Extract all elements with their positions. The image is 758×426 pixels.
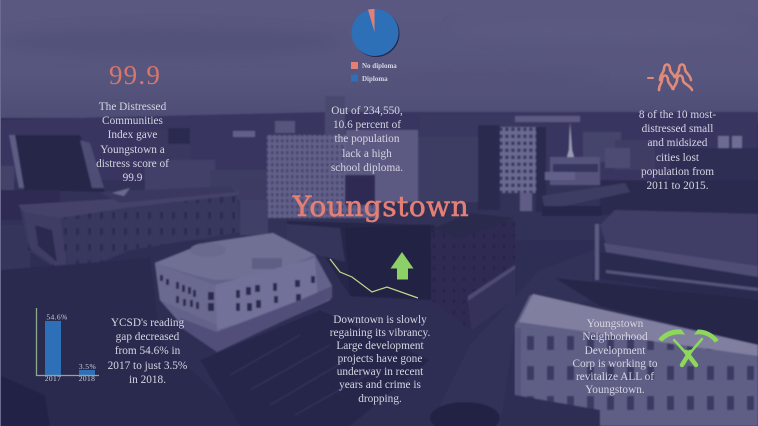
pie chart: diploma share [351, 9, 400, 83]
text: population loss: 2011 to 2015. [646, 180, 709, 192]
text: reading gap: YCSD's reading [111, 317, 184, 329]
text: reading gap [108, 317, 187, 386]
bar chart: reading gap [36, 308, 99, 383]
text: neighborhood corp: Development [585, 345, 645, 357]
text: downtown: dropping. [358, 393, 402, 405]
right parking garage [600, 210, 758, 266]
text: reading gap: from 54.6% in [115, 345, 180, 357]
text: downtown: Large development [336, 340, 424, 352]
text: reading gap: 2017 to just 3.5% [108, 360, 187, 372]
text: neighborhood corp: Youngstown. [585, 384, 645, 396]
text: distress index: distress score of [96, 158, 169, 170]
text: diploma stat: the population [335, 133, 399, 145]
text: neighborhood corp: Neighborhood [582, 331, 648, 343]
text: neighborhood corp [572, 318, 658, 396]
text: downtown [330, 314, 430, 405]
bar labels: 54.6% [46, 312, 68, 322]
text: population loss: distressed small [642, 123, 713, 135]
text: population loss [639, 109, 716, 192]
low parking deck [542, 183, 630, 210]
streets, ground [0, 258, 250, 426]
left dark tower [15, 135, 105, 192]
icon: green up arrow [390, 252, 414, 280]
text: downtown: projects have gone [338, 353, 422, 365]
icon: population people [647, 63, 694, 92]
right white tower [500, 127, 536, 193]
text: distress index: The Distressed [99, 101, 166, 113]
text: reading gap: in 2018. [129, 374, 166, 386]
icon: crossed hammers [658, 329, 719, 368]
white low building [155, 233, 332, 350]
distant blocks [325, 96, 345, 136]
bar labels: 3.5% [79, 362, 96, 371]
big civic building left [20, 192, 240, 276]
pie legend labels: No diploma [362, 62, 397, 70]
text: neighborhood corp: Corp is working to [572, 358, 658, 370]
center dark block [287, 221, 435, 300]
pie legend labels: Diploma [362, 75, 388, 83]
pie legend labels [362, 62, 397, 83]
line chart: downtown trend [330, 258, 418, 299]
text: population loss: population from [641, 166, 714, 178]
text: population loss: cities lost [656, 152, 699, 164]
text: distress index [96, 101, 169, 184]
text: distress index: Index gave [108, 129, 157, 141]
text: downtown: regaining its vibrancy. [330, 327, 430, 339]
bar labels [45, 312, 96, 383]
clouds [0, 20, 750, 83]
text: diploma stat: 10.6 percent of [333, 119, 401, 131]
bar labels: 2018 [79, 374, 95, 383]
horizon and ground [0, 118, 758, 426]
stat: 99.9 score: 99.9 [109, 60, 161, 90]
text: reading gap: gap decreased [116, 331, 179, 343]
text: distress index: Communities [102, 115, 163, 127]
heading: Youngstown: Youngstown [293, 190, 469, 223]
trees bottom [430, 402, 500, 426]
bar labels: 2017 [45, 374, 61, 383]
text: downtown: underway in recent [337, 366, 423, 378]
right brick block [431, 220, 515, 330]
church with spire [567, 122, 574, 157]
text: population loss: and midsized [648, 137, 707, 149]
text: distress index: Youngstown a [100, 144, 165, 156]
text: downtown: years and crime is [339, 379, 421, 391]
text: diploma stat: school diploma. [331, 162, 403, 174]
tall light office tower [267, 135, 379, 218]
bottom right building [515, 295, 758, 426]
text: neighborhood corp: revitalize ALL of [576, 371, 654, 383]
text: population loss: 8 of the 10 most- [639, 109, 716, 121]
text: downtown: Downtown is slowly [333, 314, 427, 326]
text: diploma stat [331, 105, 403, 174]
text: distress index: 99.9 [123, 172, 142, 184]
text: diploma stat: Out of 234,550, [331, 105, 403, 117]
text: diploma stat: lack a high [342, 148, 392, 160]
text: neighborhood corp: Youngstown [587, 318, 643, 330]
parking lot lines [230, 335, 375, 415]
